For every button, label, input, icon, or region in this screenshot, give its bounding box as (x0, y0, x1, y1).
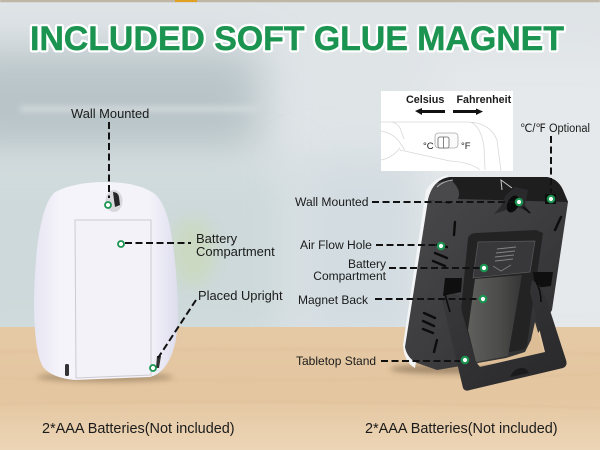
top band (428, 177, 568, 204)
callout: left Battery Compartment: Compartment (196, 244, 275, 259)
tabletop stand (442, 280, 567, 391)
background: blurred room (0, 0, 600, 345)
wall mount hole (494, 180, 531, 214)
icon: keyhole wall mount (106, 190, 122, 212)
white front edge (403, 175, 448, 368)
callout: Air Flow Hole (300, 238, 444, 252)
arrow: left (415, 108, 445, 115)
callout: right Battery Compartment: Compartment (313, 269, 387, 283)
callout: Tabletop Stand (296, 354, 468, 368)
callout: Magnet Back: Magnet Back (298, 293, 369, 307)
callout: C/F Optional (520, 123, 590, 202)
callout: right Wall Mounted: Wall Mounted (295, 195, 368, 209)
callout: left Wall Mounted (71, 106, 149, 208)
magnet sheet (468, 275, 522, 362)
callout: Air Flow Hole: Air Flow Hole (300, 238, 372, 252)
unit switch slot (545, 194, 556, 204)
background: wooden table (0, 327, 600, 450)
inset: Celsius/Fahrenheit switch (381, 91, 513, 171)
body (405, 177, 568, 370)
callout: Placed Upright: Placed Upright (198, 288, 283, 303)
white device, back view (34, 182, 178, 382)
inset: Celsius/Fahrenheit switch: °C (423, 141, 434, 152)
caption: left batteries: 2*AAA Batteries(Not included) (42, 421, 235, 437)
callout: Tabletop Stand: Tabletop Stand (296, 354, 376, 368)
callout: right Battery Compartment: Battery (348, 257, 386, 271)
title: INCLUDED SOFT GLUE MAGNET (30, 20, 564, 58)
battery compartment door (75, 220, 151, 378)
title: INCLUDED SOFT GLUE MAGNET (30, 20, 564, 58)
callout: Placed Upright (150, 288, 283, 371)
callout: right Wall Mounted (295, 195, 522, 209)
callout: left Wall Mounted: Wall Mounted (71, 106, 149, 121)
black device, back view (390, 175, 568, 391)
bevel gloss (428, 180, 459, 204)
inset: Celsius/Fahrenheit switch: °F (461, 141, 471, 152)
callout: left Battery Compartment: Battery (196, 231, 238, 246)
inset: Celsius/Fahrenheit switch: Celsius (406, 94, 444, 106)
callout: C/F Optional: ℃/℉ Optional (520, 123, 590, 135)
callout: Magnet Back (298, 293, 486, 307)
upright foot left (65, 364, 69, 376)
battery door ridges (495, 247, 516, 261)
battery door (473, 241, 535, 278)
inset: Celsius/Fahrenheit switch: Fahrenheit (456, 94, 512, 106)
air flow slots (423, 217, 561, 352)
wood through stand (478, 322, 544, 366)
callout: left Battery Compartment (118, 231, 275, 259)
arrow: right (453, 108, 483, 115)
upright foot right (156, 356, 161, 368)
callout: right Battery Compartment (313, 257, 487, 283)
caption: right batteries: 2*AAA Batteries(Not included) (365, 421, 558, 437)
hinge bars (443, 272, 553, 296)
plate shadow (458, 230, 543, 360)
